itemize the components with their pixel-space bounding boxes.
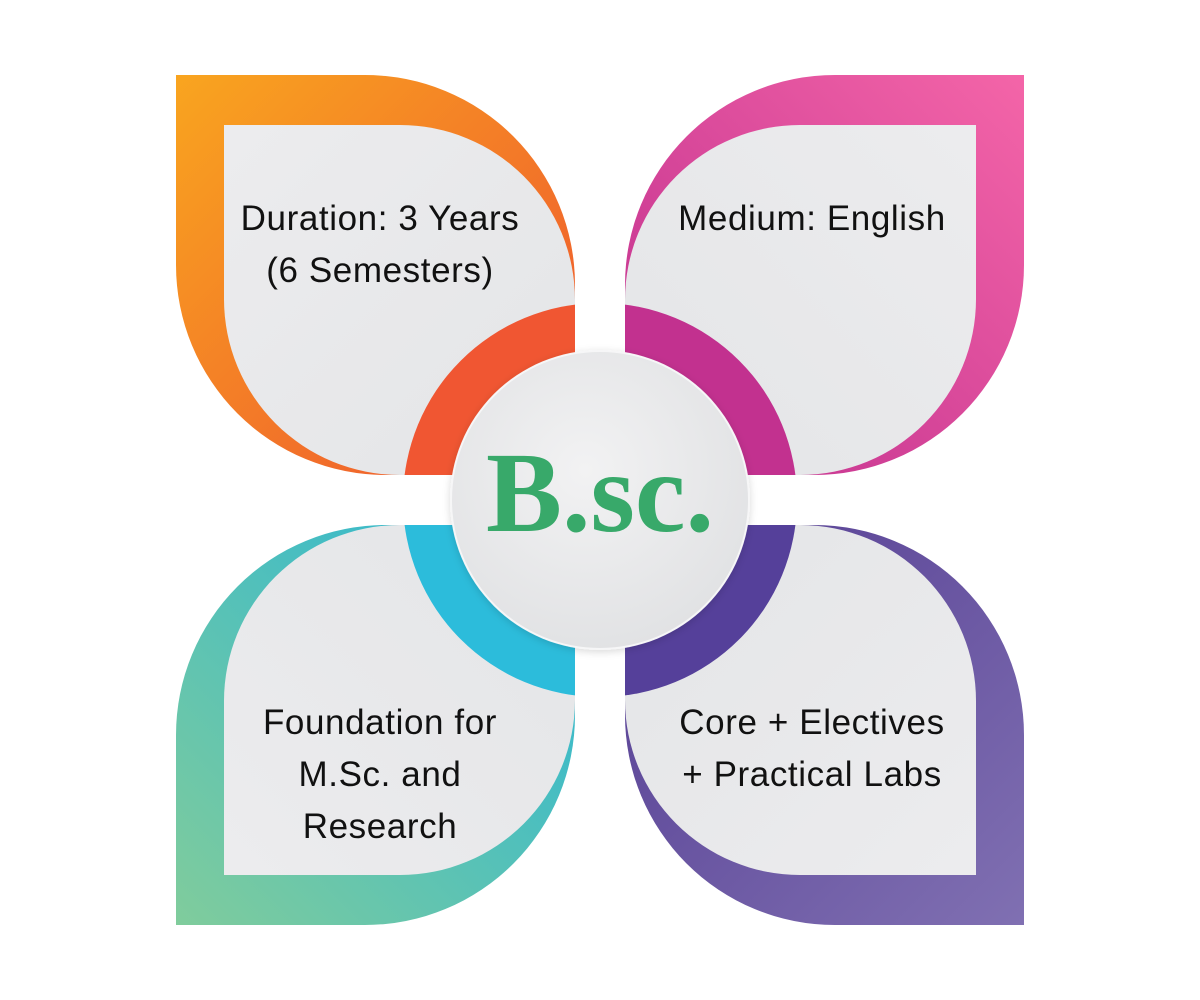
text: foundation: M.Sc. and — [299, 755, 461, 794]
petal: bottom-left — [176, 525, 575, 925]
text: foundation: Research — [303, 807, 457, 846]
text: core: Core + Electives — [679, 703, 945, 742]
center circle with title — [450, 350, 750, 650]
petal: top-left — [176, 75, 575, 475]
text: foundation: Foundation for — [263, 703, 497, 742]
text: core: + Practical Labs — [682, 755, 942, 794]
text: duration: Duration: 3 Years — [241, 199, 519, 238]
text: duration: (6 Semesters) — [266, 251, 494, 290]
petal: bottom-right — [625, 525, 1024, 925]
center circle with title: B.sc. — [486, 429, 714, 556]
text: medium: Medium: English — [678, 199, 946, 238]
petal: top-right — [625, 75, 1024, 475]
